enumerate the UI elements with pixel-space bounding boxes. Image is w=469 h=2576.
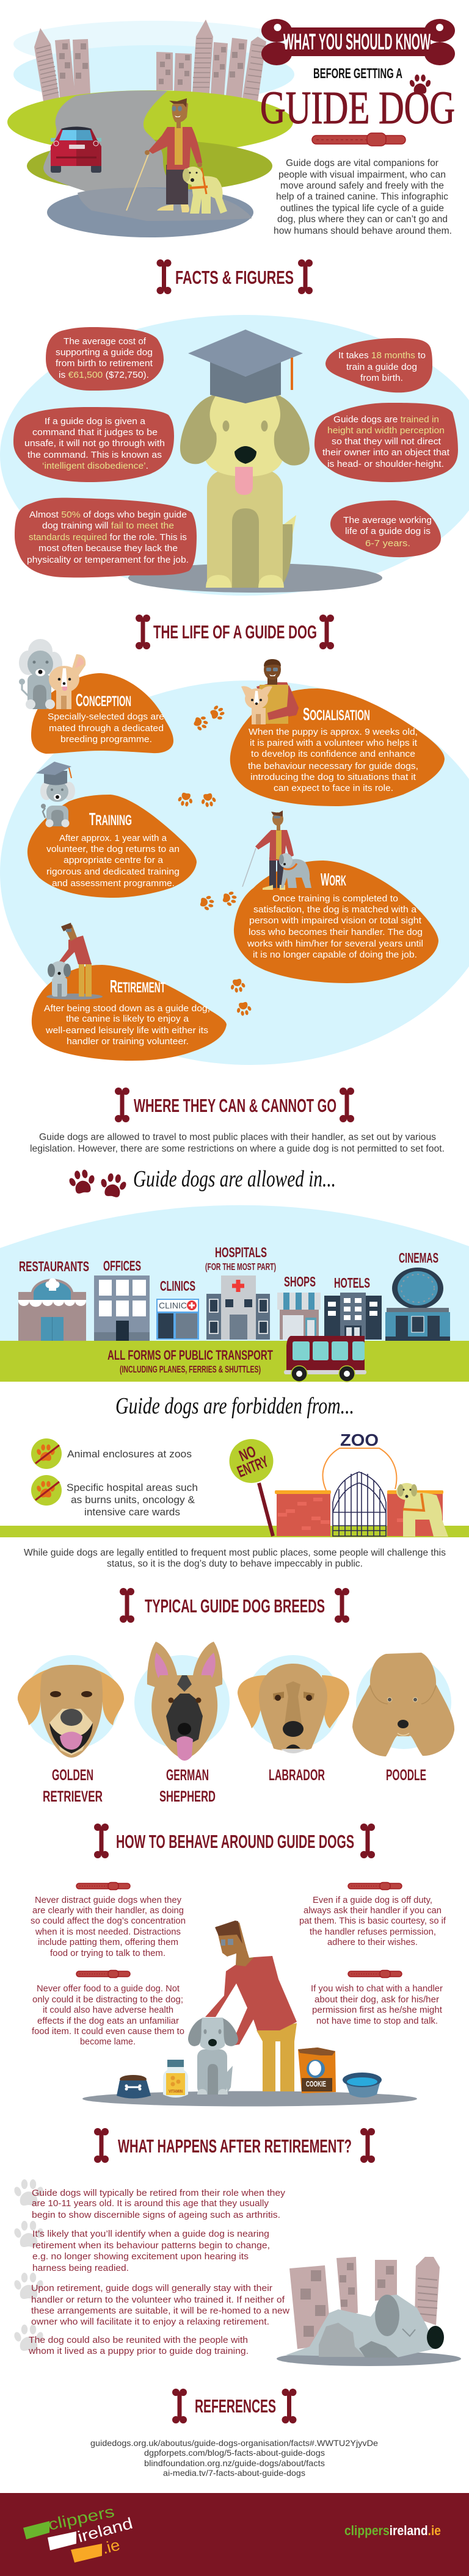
intro text: move around safely and freely with the	[280, 181, 444, 191]
labels: breed names: GERMAN	[166, 1767, 209, 1784]
heading: after retirement: WHAT HAPPENS AFTER RETIREMENT?	[118, 2135, 352, 2157]
subtitle: BEFORE GETTING A	[313, 65, 402, 81]
hero illustration: city, road, man and dog	[7, 20, 294, 237]
text: hospital areas: as burns units, oncology &	[71, 1494, 195, 1506]
card: training: rigorous and dedicated training	[46, 867, 180, 877]
text: legislation intro	[30, 1132, 445, 1154]
tip: no food: become lame.	[80, 2037, 136, 2047]
logo: clippers ireland: .ie	[100, 2535, 122, 2558]
card: socialisation: to develop its confidence and enhance	[251, 749, 415, 759]
callout: training time: from birth.	[360, 373, 403, 383]
icon: vitamin bottle	[163, 2060, 188, 2098]
panel: breeds	[18, 1642, 454, 1805]
building: shop	[277, 1274, 321, 1340]
building: restaurant	[18, 1258, 89, 1341]
icons: orange paw trail	[176, 704, 253, 1017]
illustration: zoo gate: ZOO	[340, 1431, 379, 1449]
building: shop: SHOPS	[284, 1274, 316, 1290]
breed: german shepherd	[134, 1642, 230, 1761]
card: work: person with impaired vision or total sight	[249, 915, 422, 926]
icon: no paw	[31, 1438, 62, 1469]
tip: ask permission: pat them. This is basic courtesy, so if	[299, 1916, 446, 1926]
panel: allowed places	[0, 1205, 469, 1382]
text: retirement age	[32, 2188, 286, 2220]
panel: life cycle	[0, 639, 469, 1065]
callout: intelligent disobedience	[13, 407, 174, 482]
tip: do not distract: Never distract guide dogs when they	[35, 1895, 181, 1905]
tip: do not distract: when it is most needed. Distractions	[35, 1927, 181, 1937]
card: retirement: the canine is likely to enjoy a	[66, 1014, 189, 1024]
breed: golden retriever	[18, 1655, 124, 1758]
labels: breed names: GOLDEN	[52, 1767, 93, 1784]
card: socialisation	[230, 659, 445, 806]
callout: height and width perception: so that they will not direct	[332, 436, 442, 447]
tip: chat with handler	[311, 1970, 443, 2026]
figure: guide dog with harness	[183, 167, 227, 214]
text: reference links: guidedogs.org.uk/aboutus/guide-dogs-organisation/facts#.WWTU2YjyvDe	[90, 2438, 378, 2448]
tip: ask permission	[299, 1882, 446, 1947]
tip: chat with handler: about their dog, ask for his/her	[314, 1994, 439, 2005]
callout: height and width perception	[314, 403, 458, 482]
card: conception: mated through a dedicated	[49, 723, 164, 734]
tip: do not distract: include patting them, offering them	[38, 1937, 178, 1947]
building: hospital: (FOR THE MOST PART)	[205, 1262, 276, 1272]
card: socialisation: can expect to face in its role.	[274, 783, 393, 793]
tip: do not distract: food or trying to talk to them.	[50, 1948, 165, 1958]
tip: no food	[32, 1970, 184, 2047]
callout: cost: from birth to retirement	[56, 358, 153, 369]
building: clinic: CLINICS	[160, 1278, 195, 1294]
card: training: TRAINING	[89, 810, 132, 829]
building: cinema	[385, 1250, 450, 1341]
breed: poodle	[352, 1653, 454, 1756]
icon: water bowl	[343, 2073, 382, 2098]
figure: poodle and puppy	[19, 639, 85, 709]
text: upon retirement	[31, 2283, 289, 2327]
text: spotting retirement	[32, 2229, 270, 2273]
callout: intelligent disobedience: unsafe, it will not go through with	[24, 438, 165, 449]
icon: bus	[284, 1336, 366, 1382]
figure: man with guide dog	[242, 810, 311, 890]
callout: working life: 6-7 years.	[365, 538, 410, 549]
text: reunited: The dog could also be reunited with the people with	[29, 2335, 248, 2345]
figure: man petting retired dog	[46, 923, 103, 1000]
text: spotting retirement: e.g. no longer showing excitement upon hearing its	[32, 2251, 249, 2262]
card: socialisation: it is paired with a volunteer who helps it	[250, 738, 418, 748]
callout: fail rate	[15, 498, 197, 577]
text: upon retirement: owner who will facilitate it to enjoy a relaxing retirement.	[31, 2317, 269, 2327]
card: training: appropriate centre for a	[64, 855, 164, 865]
text: spotting retirement: retirement when its behaviour patterns begin to change,	[32, 2240, 270, 2251]
card: retirement	[32, 923, 227, 1061]
sign: no entry: NO	[236, 1442, 258, 1465]
card: retirement: RETIREMENT	[110, 977, 165, 997]
illustration: sleeping dog and buildings	[277, 2257, 461, 2366]
tip: no food: effects if the dog eats an unfamiliar	[37, 2016, 179, 2026]
text: hospital areas: Specific hospital areas such	[67, 1482, 198, 1493]
intro text: help of a trained canine. This infographic	[276, 192, 448, 202]
tip: ask permission: Even if a guide dog is off duty,	[313, 1895, 432, 1905]
panel: how to behave	[31, 1882, 446, 2107]
text: website: clippersireland.ie	[344, 2523, 441, 2538]
icon: cookie bag: COOKIE	[306, 2079, 326, 2088]
illustration: zoo gate	[275, 1431, 448, 1537]
callout: fail rate: Almost 50% of dogs who begin guide	[29, 510, 187, 520]
text: reference links	[90, 2438, 378, 2478]
card: retirement: After being stood down as a guide dog,	[44, 1003, 210, 1014]
card: training: and assessment programme.	[52, 878, 175, 889]
text: retirement age: Guide dogs will typically be retired from their role when they	[32, 2188, 286, 2198]
card: conception: Specially-selected dogs are	[48, 712, 164, 722]
tip: ask permission: adhere to their wishes.	[327, 1937, 418, 1947]
text: legislation intro: legislation. However, there are some restrictions on where a guide dog is not permitted to set foot.	[30, 1144, 445, 1154]
text: zoos: Animal enclosures at zoos	[67, 1448, 192, 1460]
card: socialisation: When the puppy is approx. 9 weeks old,	[249, 727, 418, 737]
logo: clippers ireland: clippers	[46, 2502, 116, 2534]
card: work: works with him/her for several years until	[247, 939, 423, 949]
text: reunited: whom it lived as a puppy prior to guide dog training.	[28, 2346, 249, 2356]
tip: do not distract	[31, 1882, 186, 1958]
heading: the life of a guide dog: THE LIFE OF A GUIDE DOG	[153, 621, 317, 643]
text: behaviour note: While guide dogs are legally entitled to frequent most public places, some people will challenge this	[24, 1548, 446, 1558]
intro text: dog, plus where they can or can’t go and	[277, 214, 448, 225]
panel: after retirement	[13, 2179, 461, 2366]
card: conception: breeding programme.	[60, 734, 152, 745]
card: work: satisfaction, the dog is matched with a	[253, 904, 417, 915]
heading: references	[172, 2389, 297, 2423]
intro text	[274, 158, 452, 236]
callout: fail rate: dog training will fail to meet the	[42, 521, 174, 531]
building: office: OFFICES	[103, 1258, 141, 1274]
callout: working life	[330, 500, 441, 557]
text: behaviour note	[24, 1548, 446, 1569]
building: restaurant: RESTAURANTS	[19, 1258, 89, 1274]
heading: typical breeds	[120, 1588, 349, 1623]
tip: no food: Never offer food to a guide dog. Not	[37, 1983, 180, 1994]
figure: man	[205, 1921, 297, 2091]
heading: facts and figures	[156, 259, 313, 294]
figure: man with cane	[126, 98, 202, 212]
callout: height and width perception: is head- or shoulder-height.	[327, 459, 444, 469]
callout: height and width perception: height and width perception	[327, 425, 445, 436]
icon: paw above title	[409, 74, 432, 93]
figure: dog in graduation cap	[180, 330, 310, 588]
text: public transport: (INCLUDING PLANES, FERRIES & SHUTTLES)	[120, 1365, 261, 1375]
heading: after retirement	[94, 2128, 375, 2163]
subheading: forbidden: Guide dogs are forbidden from...	[115, 1393, 354, 1419]
intro text: outlines the typical life cycle of a guide	[280, 203, 444, 214]
card: training	[27, 762, 197, 898]
card: retirement: well-earned leisurely life with either its	[45, 1025, 208, 1036]
callout: cost	[46, 327, 164, 391]
labels: breed names: POODLE	[386, 1767, 426, 1784]
heading: facts and figures: FACTS & FIGURES	[175, 267, 294, 288]
figure: dog in graduation cap	[36, 762, 75, 828]
text: reference links: dgpforpets.com/blog/5-facts-about-guide-dogs	[144, 2448, 325, 2458]
panel: facts and figures	[0, 315, 469, 596]
intro text: people with visual impairment, who can	[278, 170, 446, 180]
text: hospital areas	[67, 1482, 198, 1518]
text: upon retirement: handler or return to the volunteer who trained it. If neither of	[31, 2295, 285, 2305]
tip: do not distract: are clearly with their handler, as doing	[32, 1905, 184, 1916]
card: training: After approx. 1 year with a	[59, 833, 167, 843]
intro text: Guide dogs are vital companions for	[286, 158, 438, 168]
logo: clippers ireland: ireland	[76, 2514, 134, 2546]
callout: height and width perception: Guide dogs are trained in	[333, 414, 439, 425]
text: behaviour note: status, so it is the dog’s duty to behave impeccably in public.	[107, 1559, 363, 1569]
tip: chat with handler: not have time to stop and talk.	[316, 2016, 438, 2026]
illustration: man, dog and items	[82, 1921, 417, 2107]
icon: no paw	[31, 1475, 62, 1506]
text: public transport: ALL FORMS OF PUBLIC TRANSPORT	[107, 1348, 273, 1363]
card: conception	[19, 639, 173, 754]
card: conception: CONCEPTION	[76, 691, 131, 710]
figure: grey dog	[188, 2018, 238, 2094]
logo: clippers ireland	[23, 2502, 134, 2563]
card: work: loss who becomes their handler. The dog	[249, 927, 423, 937]
callout: cost: is €61,500 ($72,750).	[59, 370, 149, 380]
text: reference links: ai-media.tv/7-facts-about-guide-dogs	[163, 2468, 305, 2478]
heading: where they can and cannot go: WHERE THEY CAN & CANNOT GO	[134, 1095, 336, 1116]
heading: how to behave	[94, 1824, 375, 1858]
labels: breed names: RETRIEVER	[43, 1788, 103, 1805]
card: work: Once training is completed to	[272, 893, 398, 904]
callout: fail rate: most often because they lack the	[38, 543, 178, 554]
callout: training time: It takes 18 months to	[338, 350, 426, 361]
heading: references: REFERENCES	[195, 2395, 276, 2417]
tip: no food: only could it be distracting to the dog;	[32, 1994, 183, 2005]
tip: chat with handler: permission first as he/she might	[312, 2005, 443, 2015]
building: clinic	[156, 1278, 199, 1340]
text: spotting retirement: harness being readied.	[32, 2263, 129, 2273]
sign: no entry: ENTRY	[234, 1452, 271, 1481]
callout: intelligent disobedience: command that it judges to be	[32, 427, 158, 438]
icons: grey paws	[13, 2179, 45, 2351]
figure: guide dog at gate	[396, 1483, 448, 1537]
card: socialisation: SOCIALISATION	[303, 705, 370, 724]
labels: breed names: LABRADOR	[269, 1767, 325, 1784]
figure: volunteer and puppy	[241, 659, 299, 724]
text: upon retirement: Upon retirement, guide dogs will generally stay with their	[31, 2283, 272, 2293]
callout: working life: The average working	[343, 515, 432, 525]
callout: fail rate: standards required for the role. This is	[29, 532, 187, 543]
card: training: volunteer, the dog returns to an	[46, 844, 180, 854]
tip: no food: it could also have adverse health	[43, 2005, 173, 2015]
breed: labrador	[238, 1655, 349, 1753]
text: hospital areas: intensive care wards	[84, 1506, 180, 1518]
panel: forbidden places	[0, 1431, 469, 1537]
callout: fail rate: physicality or temperament for the job.	[27, 555, 189, 565]
heading: the life of a guide dog	[136, 615, 334, 649]
tip: no food: food item. It could even cause them to	[32, 2026, 184, 2037]
subheading: allowed: Guide dogs are allowed in...	[133, 1166, 336, 1192]
title bone banner	[261, 19, 455, 65]
callout: intelligent disobedience: ‘intelligent disobedience’ .	[42, 461, 148, 471]
heading: where they can and cannot go	[115, 1088, 354, 1122]
callout: working life: life of a guide dog is	[345, 526, 431, 536]
card: work: WORK	[321, 870, 346, 890]
text: public transport	[107, 1348, 273, 1375]
card: retirement: handler or training volunteer.	[67, 1036, 189, 1047]
icon: two red paws	[67, 1168, 128, 1199]
building: hotel: HOTELS	[334, 1275, 370, 1291]
building: clinic: CLINIC	[159, 1301, 187, 1310]
callout: training time	[325, 338, 432, 392]
callout: cost: The average cost of	[64, 336, 147, 347]
sign: no entry	[230, 1439, 274, 1536]
tip: do not distract: so could affect the dog’s concentration	[31, 1916, 186, 1926]
text: spotting retirement: It’s likely that you’ll identify when a guide dog is nearing	[32, 2229, 269, 2239]
icon: red car	[51, 127, 101, 173]
building: cinema: CINEMAS	[399, 1250, 438, 1266]
intro text: how humans should behave around them.	[274, 226, 452, 236]
icon: food bowl	[117, 2075, 151, 2098]
icon: collar	[312, 133, 405, 146]
text: upon retirement: these arrangements are suitable, it will be re-homed to a new	[31, 2306, 289, 2316]
building: hospital	[205, 1244, 276, 1340]
icon: cookie bag	[298, 2047, 336, 2093]
building: office	[94, 1258, 150, 1341]
building: hospital: HOSPITALS	[215, 1244, 267, 1260]
tip: ask permission: always ask their handler if you can	[304, 1905, 442, 1916]
text: retirement age: begin to show discernible signs of ageing such as arthritis.	[32, 2210, 280, 2220]
callout: intelligent disobedience: the command. This is known as	[27, 450, 162, 460]
icon: vitamin bottle: VITAMIN	[169, 2090, 183, 2094]
text: legislation intro: Guide dogs are allowed to travel to most public places with their handler, as set out by various	[39, 1132, 436, 1142]
footer	[0, 2493, 469, 2576]
callout: cost: supporting a guide dog	[56, 347, 153, 358]
callout: training time: train a guide dog	[346, 362, 417, 372]
card: socialisation: introducing the dog to situations that it	[250, 772, 416, 782]
card: work: it is no longer capable of doing the job.	[253, 950, 417, 960]
card: socialisation: the behaviour necessary for guide dogs,	[248, 761, 418, 771]
text: reference links: blindfoundation.org.nz/guide-dogs/about/facts	[144, 2458, 325, 2468]
labels: breed names	[43, 1767, 426, 1805]
labels: breed names: SHEPHERD	[159, 1788, 216, 1805]
card: work	[234, 810, 438, 983]
tip: chat with handler: If you wish to chat with a handler	[311, 1983, 443, 1994]
tip: ask permission: the handler refuses permission,	[310, 1927, 436, 1937]
building: hotel	[324, 1275, 382, 1340]
heading: typical breeds: TYPICAL GUIDE DOG BREEDS	[145, 1595, 325, 1617]
text: reunited	[28, 2335, 249, 2356]
callout: height and width perception: their owner into an object that	[322, 447, 450, 458]
text: retirement age: are 10-11 years old. It is around this age that they usually	[32, 2198, 269, 2209]
callout: intelligent disobedience: If a guide dog is given a	[45, 416, 146, 427]
